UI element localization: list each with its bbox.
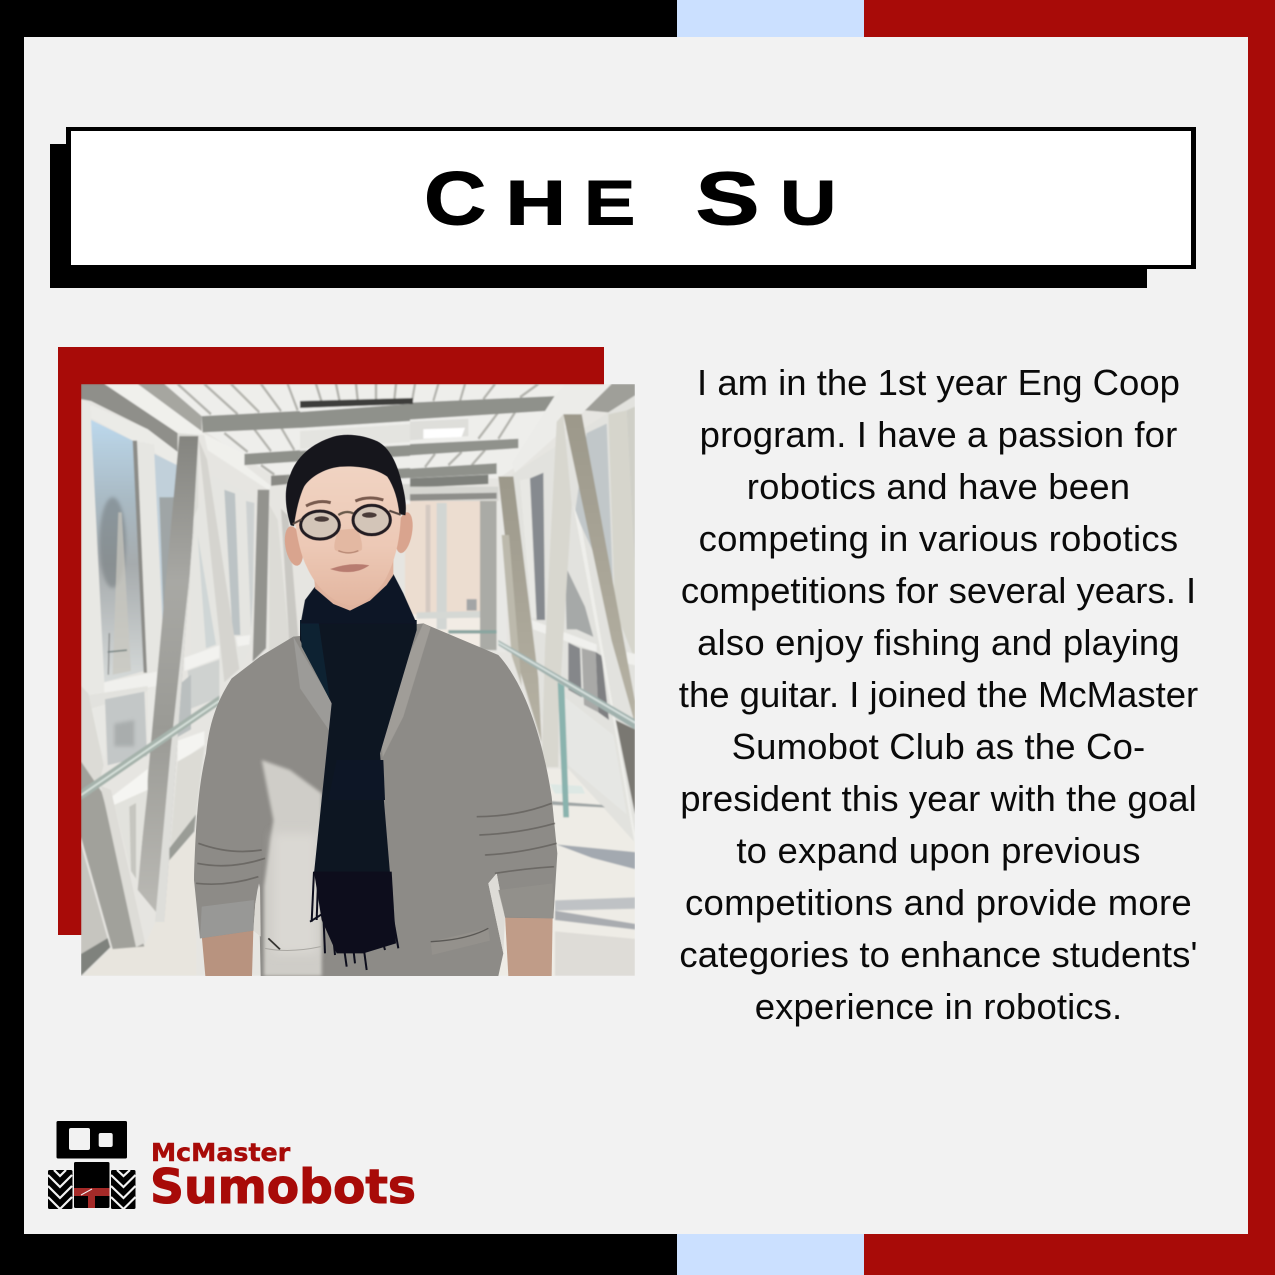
- neck: [313, 560, 393, 611]
- title shadow block: [50, 144, 1147, 288]
- title: Che Su: S: [696, 157, 760, 240]
- bio text: president this year with the goal: [680, 778, 1197, 819]
- title box: [66, 127, 1196, 269]
- light patch on cardigan: [262, 760, 322, 976]
- red accent block behind photo: [58, 347, 604, 935]
- bio text: the guitar. I joined the McMaster: [679, 674, 1198, 715]
- title: Che Su: E: [584, 167, 635, 238]
- ears: [284, 526, 303, 566]
- title: Che Su: C: [424, 158, 486, 240]
- bio text: competitions and provide more: [685, 882, 1192, 923]
- central left wall: [190, 512, 198, 573]
- bio text: to expand upon previous: [736, 830, 1141, 871]
- right side of walkway: [405, 384, 635, 976]
- person: [194, 435, 557, 976]
- centre ceiling above head: [286, 384, 413, 504]
- hair: [286, 435, 406, 526]
- cardigan: [194, 623, 557, 976]
- bio text: program. I have a passion for: [700, 414, 1177, 455]
- lower wall: [111, 769, 148, 805]
- floor right: [594, 798, 634, 843]
- glasses: [301, 511, 339, 539]
- right handrail: [558, 682, 569, 817]
- bio text: [679, 362, 1198, 1027]
- bio text: robotics and have been: [747, 466, 1130, 507]
- columns: [198, 439, 239, 682]
- bio text: also enjoy fishing and playing: [697, 622, 1180, 663]
- title: Che Su: H: [506, 168, 566, 238]
- scarf collar: [301, 574, 417, 623]
- bio text: competitions for several years. I: [681, 570, 1196, 611]
- title: Che Su: U: [780, 169, 836, 239]
- body, origin of reference crop: [194, 620, 557, 976]
- right wall: [512, 395, 635, 845]
- bio text: experience in robotics.: [755, 986, 1122, 1027]
- right columns: [498, 476, 542, 743]
- bio text: competing in various robotics: [699, 518, 1178, 559]
- bio text: categories to enhance students': [679, 934, 1198, 975]
- bio text: Sumobot Club as the Co-: [732, 726, 1145, 767]
- left diagonal: [82, 688, 103, 780]
- logo: McMaster Sumobots: [48, 1121, 416, 1210]
- forearms: [202, 915, 553, 976]
- lips: [330, 564, 369, 572]
- left side of walkway: [81, 384, 311, 976]
- scarf lower: [300, 620, 417, 970]
- portrait photo: [81, 384, 635, 976]
- logo wordmark: [150, 1138, 416, 1210]
- head: [282, 435, 417, 623]
- left handrail: [81, 695, 219, 800]
- logo wordmark: McMaster: [151, 1138, 291, 1167]
- icon: sumobot robot: [48, 1121, 136, 1209]
- cardigan details: [196, 623, 557, 955]
- face: [295, 466, 401, 588]
- eyebrows: [306, 502, 331, 506]
- bio text: I am in the 1st year Eng Coop: [697, 362, 1180, 403]
- floor left: [84, 831, 196, 976]
- scene: walkway: [81, 384, 635, 976]
- nose: [334, 528, 362, 554]
- title: Che Su: [424, 157, 836, 240]
